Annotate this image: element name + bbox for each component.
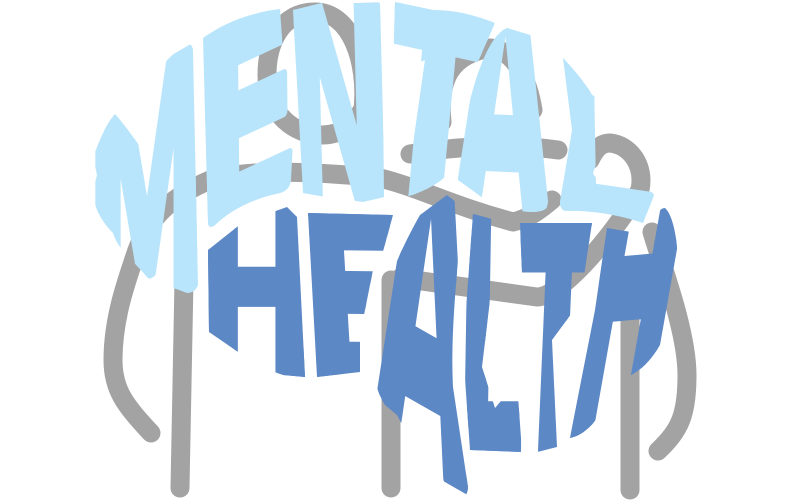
heading word: MENTAL bbox=[95, 2, 654, 293]
heading word: HEALTH bbox=[208, 195, 678, 494]
letter H: H bbox=[194, 157, 319, 436]
letter E: E bbox=[291, 166, 416, 435]
brain outline in grey strokes bbox=[113, 12, 687, 490]
letter L: L bbox=[540, 10, 657, 281]
